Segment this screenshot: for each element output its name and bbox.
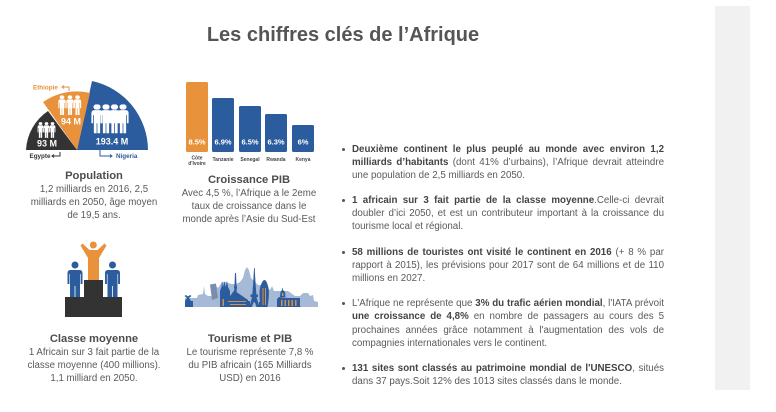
chart: GDP growth bars: Côte [191,156,203,162]
icon: podium [65,242,122,317]
text: middle class [28,346,160,384]
chart: GDP growth bars: d'Ivoire [188,161,206,167]
chart: GDP growth bars: 8.5% [188,138,206,146]
bullet 3: millions en 2027. [352,273,425,284]
chart: GDP growth bars: Rwanda [266,157,286,163]
chart: GDP growth bars: 6.5% [241,138,259,146]
bullet 1: une population de 2,5 milliards en 2050. [352,170,525,181]
chart: population semicircle: Nigeria [116,153,138,160]
bullet 2 [342,195,664,232]
chart: population semicircle: 94 M [61,116,81,126]
bullet 3: 58 millions de touristes ont visité le continent en 2016 (+ 8 % par [352,246,664,258]
bullet 1: milliards d’habitants (dont 41% d’urbains), l’Afrique devrait atteindre [352,157,664,168]
bullet 3: rapport à 2015), les prévisions pour 2017 sont de 64 millions et de 110 [352,260,664,271]
text: middle class: classe moyenne (400 millions). [28,360,160,370]
text: tourism: USD) en 2016 [219,372,281,384]
text: tourism: du PIB africain (165 Milliards [188,360,312,370]
chart: GDP growth bars: Tanzanie [212,157,234,163]
bullet 1: Deuxième continent le plus peuplé au monde avec environ 1,2 [352,144,664,155]
bullet 1 [342,144,664,181]
text: tourism: Le tourisme représente 7,8 % [186,346,314,358]
bullet 4: compagnies internationales vers le continent. [352,338,547,349]
heading: population: Population [65,170,123,182]
chart: GDP growth bars: Senegal [240,157,260,163]
icon: skyline [184,267,318,307]
bullet 5: 131 sites sont classés au patrimoine mondial de l'UNESCO, situés [352,363,664,374]
text: GDP growth: Avec 4,5 %, l’Afrique a le 2eme [182,188,316,198]
chart: GDP growth bars: 6.9% [214,138,232,146]
bullet 4: prochaines années grâce notamment à l'augmentation des vols de [352,324,664,336]
chart: GDP growth bars: Kenya [295,157,311,163]
text: GDP growth [182,188,316,224]
text: middle class: 1 Africain sur 3 fait partie de la [29,346,159,358]
bullet 2: doubler d’ici 2050, et est un contributeur important à la croissance du [352,208,664,219]
text: population: milliards en 2050, âge moyen [31,196,157,208]
bullet 3 [342,246,664,284]
chart: population semicircle: 93 M [37,138,57,148]
chart: population semicircle: Egypte [30,153,51,160]
title: Les chiffres clés de l’Afrique [207,24,479,46]
chart: population semicircle: 193.4 M [96,136,128,146]
sidebar panel [715,6,750,390]
text: population: 1,2 milliards en 2016, 2,5 [40,184,148,194]
chart: population semicircle: Ethiopie [33,84,58,92]
text: population [31,184,157,220]
list: key facts [342,144,664,387]
chart: GDP growth bars [186,82,314,167]
chart: GDP growth bars: 6.3% [267,138,285,146]
bullet 4: L'Afrique ne représente que 3% du trafic aérien mondial, l'IATA prévoit [352,298,664,309]
heading: middle class: Classe moyenne [50,333,138,345]
heading: tourism: Tourisme et PIB [208,333,292,345]
chart: population semicircle [26,81,148,160]
bullet 2: 1 africain sur 3 fait partie de la classe moyenne.Celle-ci devrait [352,195,664,206]
text: GDP growth: monde après l’Asie du Sud-Est [182,214,316,224]
bullet 5: dans 37 pays.Soit 12% des 1013 sites classés dans le monde. [352,376,622,387]
bullet 4: une croissance de 4,8% en nombre de passagers au cours des 5 [352,311,664,322]
bullet 5 [342,363,664,387]
text: population: de 19,5 ans. [67,210,121,220]
heading: GDP growth: Croissance PIB [208,174,290,186]
text: tourism [186,346,314,384]
chart: GDP growth bars: 6% [298,138,309,146]
bullet 2: tourisme local et régional. [352,221,463,232]
text: GDP growth: taux de croissance dans le [192,200,306,212]
text: middle class: 1,1 milliard en 2050. [50,372,138,384]
bullet 4 [342,298,664,349]
